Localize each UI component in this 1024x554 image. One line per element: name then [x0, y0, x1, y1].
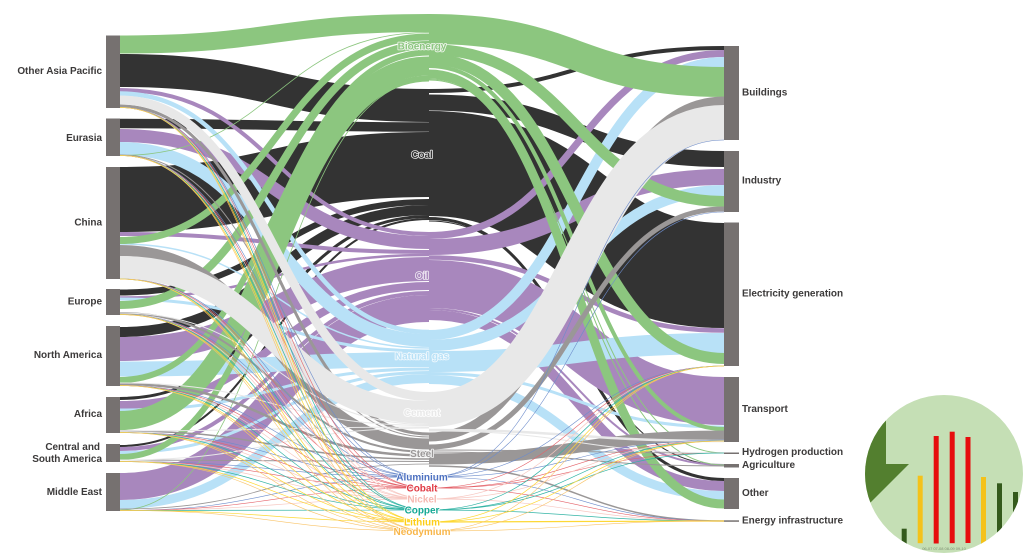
flows: oil — [120, 54, 724, 486]
right sector labels: Energy infrastructure — [742, 516, 844, 526]
fuel and mineral labels: Steel — [410, 449, 434, 460]
left region labels: Africa — [74, 409, 102, 420]
left region labels: Central and — [45, 442, 100, 453]
fuel and mineral labels: Copper — [405, 506, 440, 516]
icon: dark green wedge — [865, 420, 909, 502]
flows: natural gas — [120, 62, 724, 504]
icon: circular chart badge — [850, 395, 1023, 554]
left region labels: Europe — [68, 296, 102, 308]
right sector labels: Other — [742, 488, 769, 499]
fuel and mineral labels: Nickel — [407, 494, 437, 506]
flows: steel — [120, 101, 724, 521]
flows: neodymium — [120, 108, 724, 531]
fuel and mineral labels: Neodymium — [394, 527, 451, 538]
flows: copper — [120, 108, 724, 521]
flows: lithium — [120, 108, 724, 522]
fuel and mineral labels: Aluminium — [396, 472, 448, 484]
left region nodes — [106, 36, 120, 511]
right sector labels: Industry — [742, 176, 782, 186]
right sector labels: Hydrogen production — [742, 447, 843, 458]
right sector labels: Buildings — [742, 88, 788, 98]
flows: coal — [120, 48, 724, 480]
fuel and mineral labels: Bioenergy — [398, 42, 447, 52]
right sector labels: Transport — [742, 404, 789, 415]
icon: bars — [902, 432, 1018, 554]
right sector labels: Electricity generation — [742, 288, 843, 300]
left region labels: Other Asia Pacific — [17, 66, 102, 77]
icon: tiny axis labels: 06-07 07-08 08-09 09-10 — [922, 546, 967, 551]
left region labels: Eurasia — [66, 133, 102, 144]
flows: nickel — [120, 108, 724, 521]
left region labels: South America — [32, 454, 102, 465]
fuel and mineral labels: Coal — [411, 150, 433, 161]
left region labels: North America — [34, 350, 102, 361]
right sector labels: Agriculture — [742, 460, 795, 471]
left region labels: China — [74, 218, 102, 228]
left region labels: Middle East — [47, 487, 103, 498]
left region labels — [17, 66, 103, 498]
flows: cement — [120, 100, 724, 460]
fuel and mineral labels: Oil — [415, 271, 429, 282]
right sector nodes — [724, 46, 739, 522]
right sector labels — [742, 88, 844, 526]
fuel and mineral labels: Cement — [404, 408, 441, 419]
flows: cobalt — [120, 108, 724, 521]
flows: bioenergy — [120, 23, 724, 510]
fuel and mineral labels: Lithium — [404, 518, 440, 528]
fuel and mineral labels: Cobalt — [407, 484, 438, 494]
flows: aluminium — [120, 108, 724, 521]
fuel and mineral labels — [394, 42, 451, 538]
fuel and mineral labels: Natural gas — [395, 352, 450, 362]
